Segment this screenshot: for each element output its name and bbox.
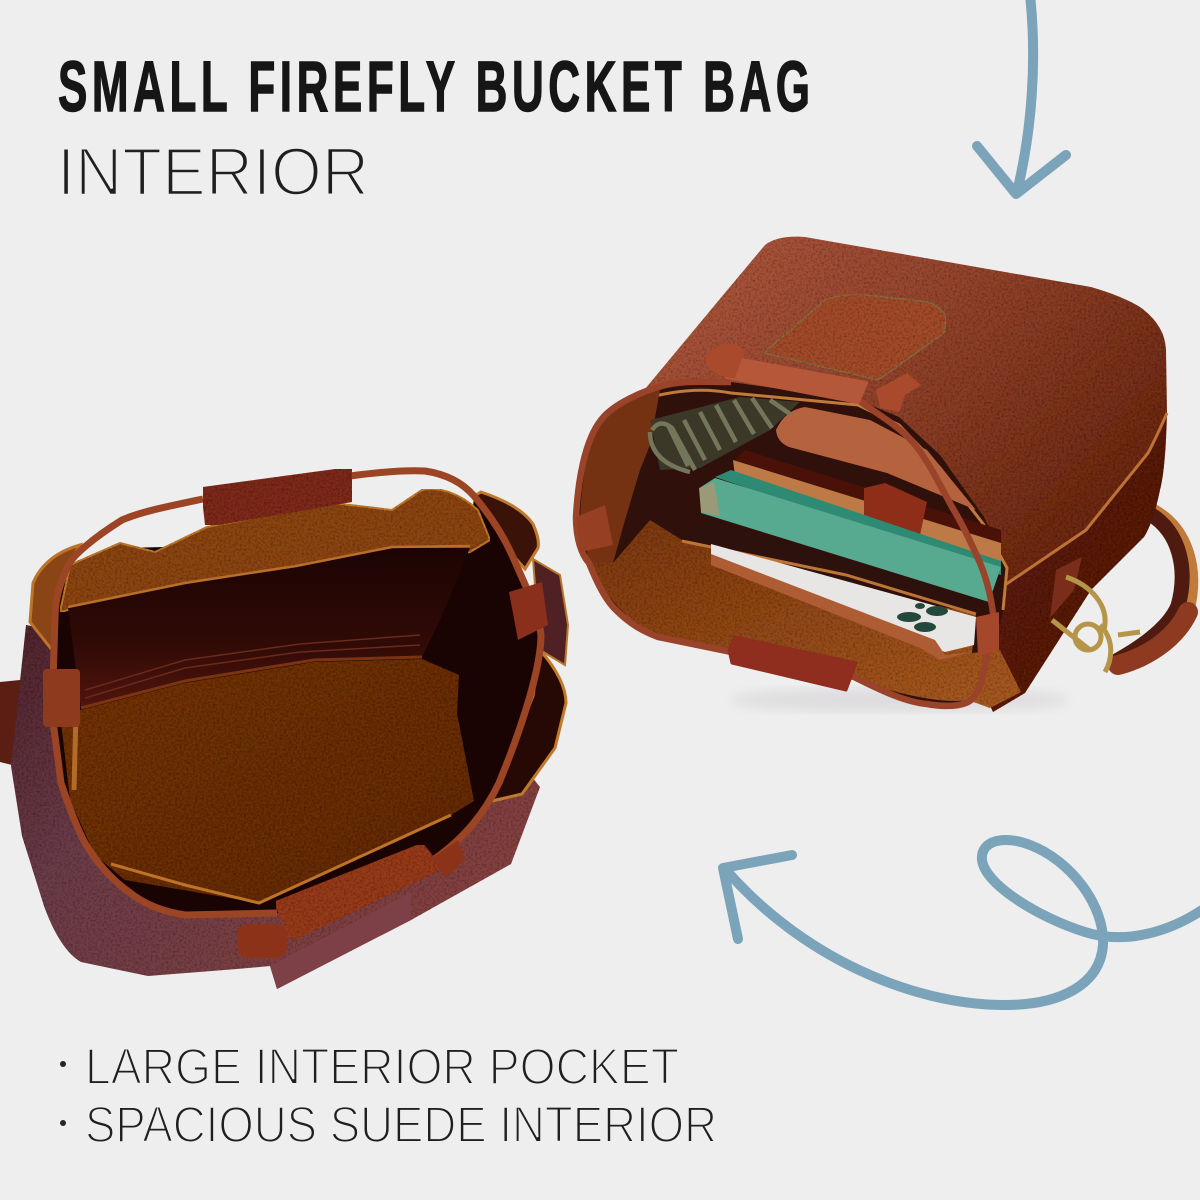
arrow: looping arrow pointing to left bag bbox=[723, 840, 1200, 1005]
right knot bbox=[876, 373, 921, 412]
right side loop bbox=[509, 582, 548, 640]
product: left bag open bbox=[0, 469, 568, 989]
pouch bbox=[776, 407, 976, 510]
bag top leather panel bbox=[640, 237, 1167, 585]
suede floor and pocket bbox=[589, 520, 1021, 708]
right side loop bbox=[976, 612, 999, 656]
pocket edge bbox=[682, 541, 976, 614]
coil bbox=[650, 397, 800, 472]
suede floor bbox=[60, 659, 474, 903]
title bbox=[57, 47, 810, 210]
interior opening bbox=[576, 382, 1007, 706]
feature: large interior pocket: LARGE INTERIOR POCKET bbox=[85, 1038, 679, 1095]
phone bbox=[711, 544, 976, 660]
bottom handle sleeve bbox=[276, 845, 440, 939]
bullet two bbox=[60, 1120, 66, 1126]
bullet one bbox=[60, 1061, 66, 1067]
shoulder strap bbox=[1118, 512, 1189, 665]
bottom knot bbox=[237, 924, 287, 958]
notebook bbox=[733, 450, 1001, 562]
outer body bbox=[11, 625, 540, 989]
floor side edge bbox=[74, 712, 76, 790]
left side loop bbox=[43, 669, 80, 727]
top handle sleeve bbox=[727, 358, 866, 402]
top handle sleeve bbox=[203, 469, 352, 525]
left suede wing bbox=[30, 545, 80, 650]
dark interior bbox=[52, 496, 541, 915]
back suede wall bbox=[60, 489, 490, 612]
arrow: top right pointing down bbox=[977, 0, 1066, 194]
bottom handle sleeve bbox=[729, 637, 856, 690]
strap tab with logo bbox=[764, 295, 946, 380]
pocket leather bbox=[68, 548, 470, 708]
seam edge bbox=[1005, 413, 1167, 585]
green book bbox=[699, 470, 1001, 602]
ring handle right part bbox=[350, 471, 541, 860]
floor front edge bbox=[111, 815, 451, 903]
pocket back bbox=[682, 520, 976, 612]
suede inner left wall bbox=[580, 390, 660, 563]
right strap stub bbox=[533, 559, 568, 665]
heading: small firefly bucket bag: SMALL FIREFLY BUCKET BAG bbox=[58, 47, 810, 127]
left knot bbox=[705, 344, 745, 378]
pocket top edge bbox=[68, 546, 470, 607]
bottom tab bbox=[270, 892, 411, 989]
subheading: interior: INTERIOR bbox=[57, 134, 369, 210]
opening rim bbox=[640, 390, 1007, 610]
right lower wing bbox=[492, 650, 566, 801]
product: right bag with items bbox=[576, 237, 1189, 712]
left side loop bbox=[576, 505, 613, 552]
ring handle left part bbox=[52, 499, 277, 915]
bag lower side panel bbox=[960, 413, 1167, 712]
feature: spacious suede interior: SPACIOUS SUEDE INTERIOR bbox=[85, 1096, 717, 1153]
brass hardware bbox=[1050, 557, 1140, 672]
pocket stitching bbox=[85, 635, 420, 698]
right knot stub bbox=[432, 840, 465, 878]
ring handle bbox=[576, 382, 993, 706]
pocket bottom edge bbox=[81, 657, 422, 708]
feature list bbox=[60, 1038, 717, 1153]
left strap bbox=[0, 680, 48, 770]
right upper wing bbox=[474, 492, 538, 569]
